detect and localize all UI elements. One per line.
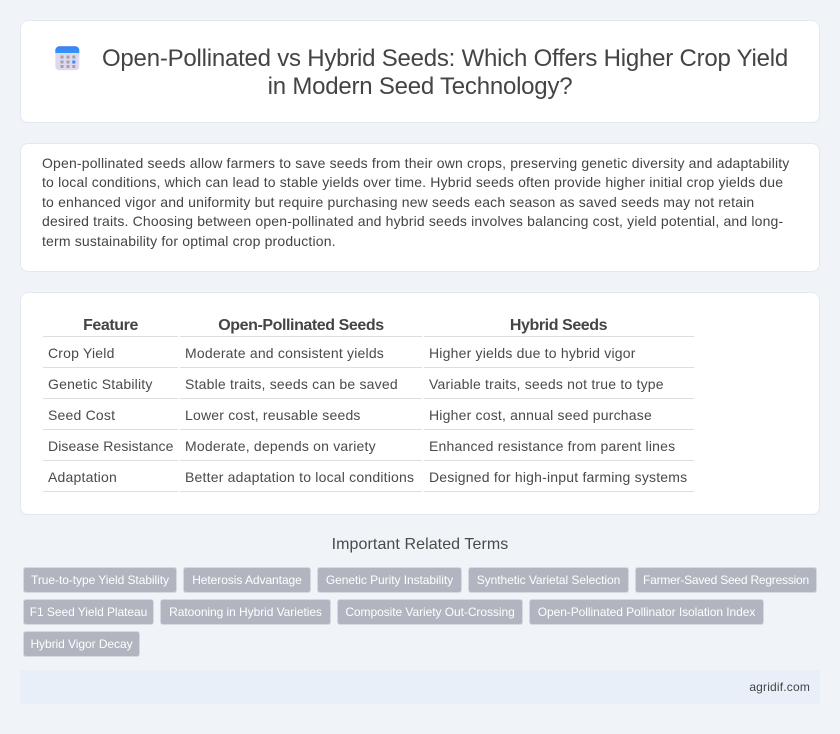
tag list: related terms bbox=[23, 567, 817, 657]
footer bar bbox=[20, 670, 820, 704]
row: crop yield: Crop Yield bbox=[48, 345, 115, 361]
row: disease resistance bbox=[48, 438, 675, 454]
text block: intro paragraph bbox=[42, 155, 790, 249]
row: adaptation bbox=[48, 469, 687, 485]
row: disease resistance: Enhanced resistance from parent lines bbox=[429, 438, 675, 454]
text block: intro paragraph: Open-pollinated seeds allow farmers to save seeds from their own crops, preserving genetic diversity and adaptability bbox=[42, 155, 789, 171]
icon: calendar grid bbox=[55, 46, 80, 70]
table header: Open-Pollinated Seeds bbox=[218, 317, 384, 334]
panel: title card bbox=[20, 20, 820, 123]
table header bbox=[83, 317, 607, 334]
text block: intro paragraph: term sustainability for optimal crop production. bbox=[42, 233, 336, 249]
footer source text: agridif.com bbox=[749, 680, 810, 694]
title: in Modern Seed Technology? bbox=[268, 73, 572, 100]
row: disease resistance: Moderate, depends on variety bbox=[185, 438, 376, 454]
row: crop yield: Moderate and consistent yields bbox=[185, 345, 384, 361]
row: genetic stability bbox=[48, 376, 664, 392]
title bbox=[102, 45, 788, 100]
row: adaptation: Better adaptation to local conditions bbox=[185, 469, 414, 485]
text block: intro paragraph: to enhanced vigor and uniformity but require purchasing new seeds each season as saved seeds may not retain bbox=[42, 194, 754, 210]
row: seed cost: Higher cost, annual seed purchase bbox=[429, 407, 652, 423]
row: genetic stability: Variable traits, seeds not true to type bbox=[429, 376, 664, 392]
panel: intro text bbox=[20, 143, 820, 272]
tag list: related terms: Open-Pollinated Pollinator Isolation Index bbox=[538, 605, 755, 619]
tag list: related terms: F1 Seed Yield Plateau bbox=[30, 605, 147, 619]
tag list: related terms: Hybrid Vigor Decay bbox=[30, 637, 133, 651]
title: Open-Pollinated vs Hybrid Seeds: Which Offers Higher Crop Yield bbox=[102, 45, 788, 72]
tag list: related terms: True-to-type Yield Stability bbox=[31, 573, 169, 587]
row: crop yield bbox=[48, 345, 636, 361]
table header: Feature bbox=[83, 317, 138, 334]
table header: Hybrid Seeds bbox=[510, 317, 607, 334]
row: genetic stability: Stable traits, seeds can be saved bbox=[185, 376, 398, 392]
tag list: related terms: Synthetic Varietal Selection bbox=[477, 573, 620, 587]
tag list: related terms: Composite Variety Out-Crossing bbox=[345, 605, 515, 619]
heading: related terms: Important Related Terms bbox=[332, 536, 508, 553]
tag list: related terms: Ratooning in Hybrid Varieties bbox=[169, 605, 322, 619]
row: genetic stability: Genetic Stability bbox=[48, 376, 153, 392]
row: adaptation: Designed for high-input farming systems bbox=[429, 469, 687, 485]
row: seed cost: Seed Cost bbox=[48, 407, 115, 423]
row: adaptation: Adaptation bbox=[48, 469, 117, 485]
text block: intro paragraph: desired traits. Choosing between open-pollinated and hybrid seeds involves balancing cost, yield potential, and long- bbox=[42, 213, 783, 229]
tag list: related terms: Heterosis Advantage bbox=[192, 573, 302, 587]
panel: comparison table bbox=[20, 292, 820, 515]
row: seed cost bbox=[48, 407, 652, 423]
tag list: related terms: Genetic Purity Instability bbox=[326, 573, 453, 587]
row: disease resistance: Disease Resistance bbox=[48, 438, 174, 454]
text block: intro paragraph: to local conditions, which can lead to stable yields over time. Hybrid seeds often provide higher initial crop yields due bbox=[42, 174, 783, 190]
row: seed cost: Lower cost, reusable seeds bbox=[185, 407, 361, 423]
row: crop yield: Higher yields due to hybrid vigor bbox=[429, 345, 636, 361]
tag list: related terms: Farmer-Saved Seed Regression bbox=[643, 573, 809, 587]
